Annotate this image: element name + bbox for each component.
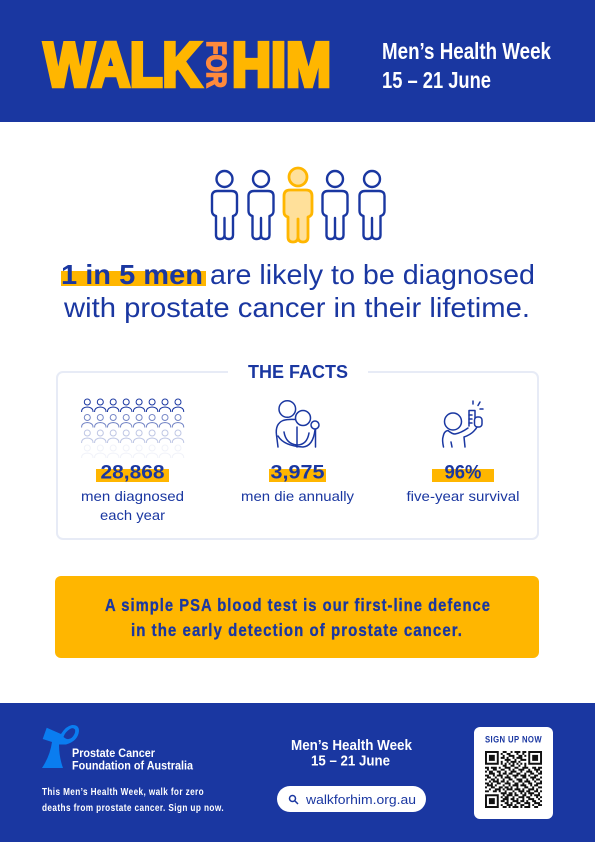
stat: men die annually: men die annually [241,488,354,504]
callout: PSA blood test [55,576,539,658]
headline statistic [61,259,535,323]
website pill [277,786,426,812]
stat: men diagnosed [81,462,184,523]
icon: men hugging [276,401,319,447]
callout: PSA blood test: A simple PSA blood test is our first-line defence [105,595,491,615]
stat: men die annually [241,462,354,504]
logo: Walk For Him: FOR [201,41,232,88]
panel: the facts [57,361,538,539]
stat: five-year survival: 96% [444,462,482,484]
header banner [0,0,595,122]
organisation name [72,748,194,772]
logo: Walk For Him: HIM [232,31,331,100]
footer banner [0,703,595,842]
headline statistic: with prostate cancer in their lifetime. [63,292,530,323]
icon: search [290,796,298,804]
footer date: Men’s Health Week [291,737,413,754]
stat: five-year survival [406,462,520,504]
icon: crowd of men [82,399,184,458]
organisation name: Foundation of Australia [72,760,194,772]
footer message: deaths from prostate cancer. Sign up now. [42,802,224,814]
logo: Walk For Him: WALK [44,31,201,100]
stat: five-year survival: five-year survival [406,488,520,504]
QR sign up card: SIGN UP NOW [485,734,542,746]
icon: five men, one highlighted [212,168,384,242]
header date text: Men’s Health Week [382,38,551,64]
headline statistic: 1 in 5 men [61,259,203,290]
footer date: 15 – 21 June [311,752,390,770]
heading: the facts: THE FACTS [248,361,348,382]
icon: man holding test tube [443,401,483,447]
website pill: walkforhim.org.au [305,793,416,807]
footer date [291,737,413,770]
organisation name: Prostate Cancer [72,748,155,760]
stat: men diagnosed: each year [100,507,165,523]
footer message [42,786,224,814]
footer message: This Men’s Health Week, walk for zero [42,786,204,798]
header date text [382,38,551,93]
header date text: 15 – 21 June [382,67,491,93]
stat: men diagnosed: men diagnosed [81,488,184,504]
icon: ribbon logo [42,725,79,768]
logo: Walk For Him [44,31,331,100]
QR sign up card [474,727,553,819]
QR code [485,752,542,807]
headline statistic: are likely to be diagnosed [210,259,535,290]
stat: men diagnosed: 28,868 [100,462,164,484]
stat: men die annually: 3,975 [270,462,325,484]
callout: PSA blood test: in the early detection of prostate cancer. [131,620,463,640]
